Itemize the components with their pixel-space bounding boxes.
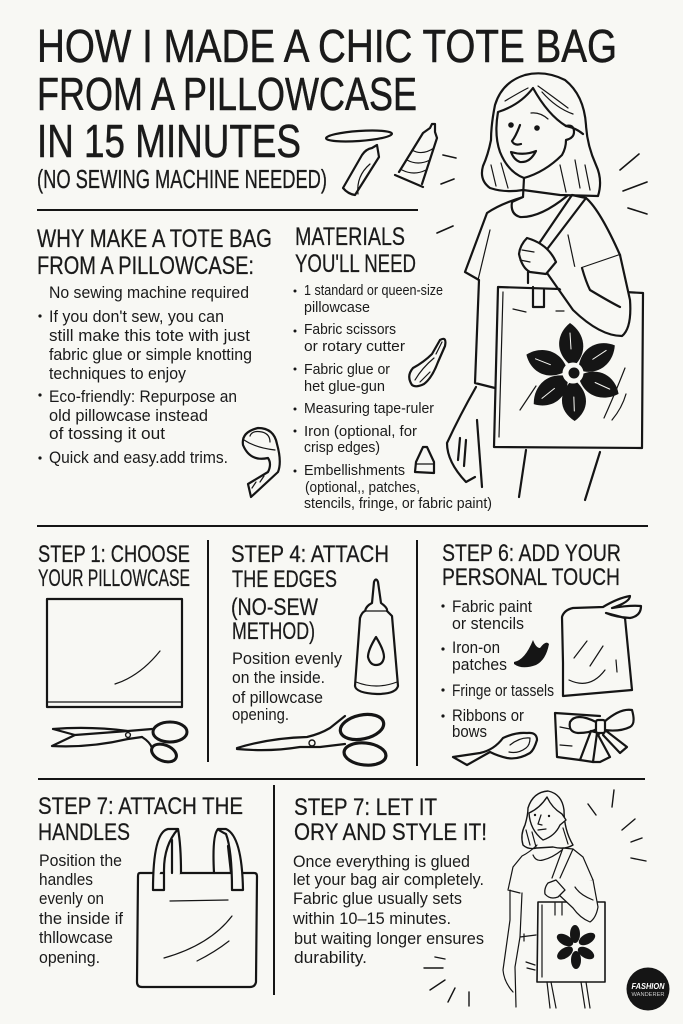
heading: step 4	[231, 541, 389, 645]
right arm	[545, 255, 630, 336]
heading: step 1	[38, 541, 190, 592]
text block: materials list: Fabric glue or	[304, 361, 390, 378]
text block: step 7 dry: but waiting longer ensures	[294, 930, 484, 948]
icon: scissors	[237, 711, 387, 767]
logo badge	[626, 968, 670, 1010]
left arm	[447, 387, 482, 487]
text block: step 7 dry: let your bag air completely.	[293, 871, 484, 889]
text block: materials list: Fabric scissors	[304, 321, 396, 338]
icon: small glue bottle	[343, 145, 379, 195]
logo badge: FASHION	[632, 981, 665, 991]
text block: materials list: Embellishments	[304, 462, 405, 479]
small flower print	[555, 925, 597, 969]
icon: measuring tape	[243, 428, 280, 497]
icon: glue bottle	[355, 580, 398, 694]
text block: materials list: Measuring tape-ruler	[304, 400, 434, 417]
heading: step 7 handles: STEP 7: ATTACH THE	[38, 793, 243, 820]
text block: why bullets: No sewing machine required	[49, 284, 249, 302]
text block: step 6: or stencils	[452, 615, 524, 633]
heading: materials	[295, 223, 416, 278]
text block: step 4: of pillowcase	[232, 689, 323, 707]
text block: step 4: opening.	[232, 706, 289, 724]
icon: finished tote	[137, 829, 257, 987]
heading: why: WHY MAKE A TOTE BAG	[37, 225, 272, 253]
title: (NO SEWING MACHINE NEEDED)	[37, 164, 327, 194]
text block: step 7 dry	[292, 853, 484, 967]
text block: step 7 dry: durability.	[294, 949, 367, 967]
heading: step 7 handles	[38, 793, 243, 846]
icon: pillowcase	[47, 599, 182, 707]
icon: small bottle	[415, 447, 434, 473]
motion rays small	[424, 790, 646, 1006]
face	[496, 88, 574, 178]
text block: why bullets: still make this tote with just	[49, 327, 250, 345]
text block: why bullets: Quick and easy.add trims.	[49, 449, 228, 467]
icon: glue tube	[395, 124, 437, 187]
heading: materials: MATERIALS	[295, 223, 405, 251]
heading: step 4: METHOD)	[232, 618, 315, 645]
heading: step 7 handles: HANDLES	[38, 819, 130, 846]
text block: step 6: Iron-on	[452, 639, 500, 657]
panel: step 7 dry and style	[292, 790, 646, 1008]
text block: materials list	[294, 282, 492, 512]
text block: step 7 handles	[39, 852, 123, 967]
text block: why bullets: of tossing it out	[49, 425, 165, 443]
heading: step 6: PERSONAL TOUCH	[442, 564, 620, 591]
heading: step 4: THE EDGES	[232, 566, 337, 593]
icon: twisted tape	[409, 339, 445, 386]
text block: materials list: 1 standard or queen-size	[304, 282, 443, 299]
flower print	[522, 323, 624, 421]
heading: step 4: STEP 4: ATTACH	[231, 541, 389, 568]
heading: materials: YOU'LL NEED	[295, 250, 416, 278]
text block: why bullets: techniques to enjoy	[49, 365, 187, 383]
icon: scissors	[52, 722, 187, 765]
illustration: small woman with tote	[503, 791, 605, 1008]
text block: materials list: crisp edges)	[304, 439, 380, 456]
heading: step 7 dry: ORY AND STYLE IT!	[294, 819, 487, 846]
panel: step 6	[441, 540, 641, 765]
text block: step 7 handles: handles	[39, 871, 93, 889]
text block: why bullets: If you don't sew, you can	[49, 308, 224, 326]
heading: step 6: STEP 6: ADD YOUR	[442, 540, 621, 567]
shirt and torso	[465, 178, 524, 388]
heading: step 6	[442, 540, 621, 591]
heading: step 1: YOUR PILLOWCASE	[38, 565, 190, 592]
icon: ribbon	[453, 733, 537, 765]
heading: step 1: STEP 1: CHOOSE	[38, 541, 190, 568]
panel: step 7 attach handles	[38, 793, 257, 987]
illustration: woman with tote bag	[447, 73, 643, 500]
text block: step 6: bows	[452, 723, 487, 741]
panel: materials	[294, 223, 492, 512]
text block: step 7 handles: thllowcase	[39, 929, 113, 947]
text block: step 4	[232, 650, 343, 724]
text block: step 7 dry: Fabric glue usually sets	[293, 890, 462, 908]
text block: step 7 handles: Position the	[39, 852, 122, 870]
text block: step 7 dry: Once everything is glued	[293, 853, 470, 871]
icon: fabric with bow	[555, 710, 634, 762]
text block: step 6: Fringe or tassels	[452, 682, 554, 700]
icon: iron-on patch	[514, 640, 549, 667]
heading: why: FROM A PILLOWCASE:	[37, 252, 254, 280]
heading: step 7 dry	[294, 794, 487, 846]
text block: materials list: or rotary cutter	[304, 338, 405, 355]
text block: step 6: patches	[452, 656, 507, 674]
text block: materials list: pillowcase	[304, 299, 370, 316]
title: IN 15 MINUTES	[37, 115, 301, 167]
text block: step 7 handles: opening.	[39, 949, 100, 967]
icon: gathered pillowcase bag	[562, 596, 641, 696]
hair	[482, 73, 600, 196]
text block: why bullets: fabric glue or simple knotting	[49, 346, 252, 364]
panel: why make a tote bag	[37, 225, 280, 497]
text block: materials list: (optional,, patches,	[305, 479, 420, 496]
title: FROM A PILLOWCASE	[37, 68, 417, 120]
text block: materials list: Iron (optional, for	[304, 423, 417, 440]
text block: step 7 handles: evenly on	[39, 890, 104, 908]
text block: step 4: on the inside.	[232, 669, 325, 687]
text block: why bullets: old pillowcase instead	[49, 407, 208, 425]
icon: ring of trim	[326, 129, 392, 143]
panel: step 1	[38, 541, 190, 765]
heading: step 4: (NO-SEW	[231, 594, 318, 621]
text block: step 7 dry: within 10–15 minutes.	[292, 910, 451, 928]
title	[37, 20, 617, 194]
logo badge: WANDERER	[632, 992, 665, 998]
text block: materials list: het glue-gun	[304, 378, 385, 395]
hand	[519, 238, 556, 274]
heading: why	[37, 225, 272, 280]
text block: why bullets	[38, 284, 252, 467]
text block: step 4: Position evenly	[232, 650, 343, 668]
motion rays	[437, 154, 647, 233]
text block: materials list: stencils, fringe, or fabric paint)	[304, 495, 492, 512]
heading: step 7 dry: STEP 7: LET IT	[294, 794, 437, 821]
panel: step 4	[231, 541, 398, 767]
text block: step 7 handles: the inside if	[39, 910, 123, 928]
text block: step 6	[441, 598, 554, 741]
text block: step 6: Fabric paint	[452, 598, 532, 616]
tote bag	[494, 287, 643, 448]
text block: why bullets: Eco-friendly: Repurpose an	[49, 388, 237, 406]
text block: step 6: Ribbons or	[452, 707, 524, 725]
